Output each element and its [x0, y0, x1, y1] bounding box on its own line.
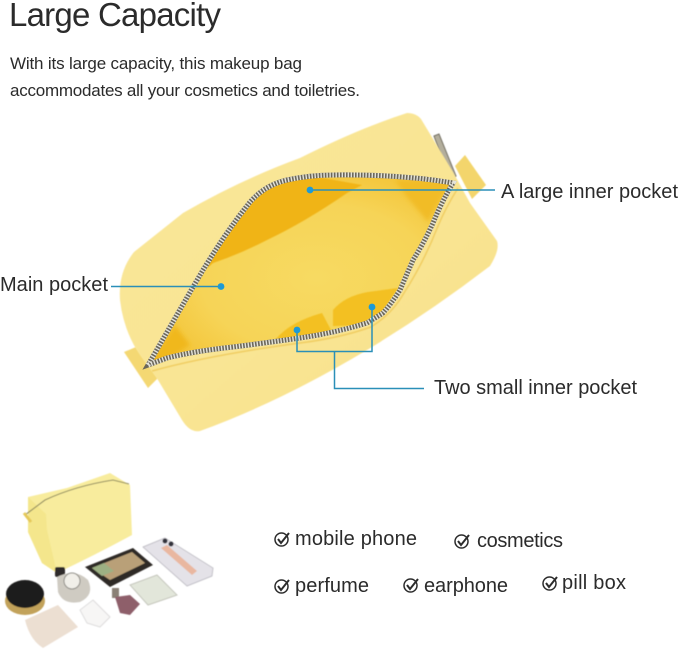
left tab [124, 347, 158, 388]
callout: a large inner pocket [307, 181, 678, 203]
item: mobile phone: mobile phone [295, 528, 417, 550]
description text [10, 54, 360, 100]
icon: mobile phone [143, 538, 213, 586]
right tab and zipper pull [434, 134, 486, 199]
item: earphone: earphone [424, 575, 508, 597]
icon: eyeshadow palette [85, 548, 153, 587]
back inner wall [395, 180, 450, 222]
callout: main pocket: Main pocket [0, 274, 108, 296]
icon: powder compact [130, 575, 177, 605]
zip opening interior [154, 177, 449, 360]
icon: pill box [25, 605, 78, 648]
product photo: bag with contents [5, 473, 213, 648]
bag body [120, 113, 498, 431]
callout: main pocket [0, 274, 224, 296]
closed yellow bag [24, 473, 132, 573]
zipper teeth [148, 175, 453, 365]
two small inner pockets [276, 288, 398, 342]
lower left shadow [154, 324, 191, 360]
description text: accommodates all your cosmetics and toiletries. [10, 81, 360, 100]
item: cosmetics: cosmetics [477, 530, 563, 552]
item: perfume: perfume [295, 575, 369, 597]
callout: two small inner pocket [294, 304, 637, 399]
large inner pocket [205, 172, 362, 270]
description text: With its large capacity, this makeup bag [10, 54, 302, 73]
checklist [275, 528, 626, 597]
callout: a large inner pocket: A large inner pocket [501, 181, 678, 203]
icon: perfume bottle [55, 567, 90, 603]
icon: earphone case [80, 600, 110, 627]
open makeup bag illustration [120, 113, 498, 431]
item: pill box: pill box [562, 572, 626, 594]
icon: nail polish [112, 588, 140, 615]
callout: two small inner pocket: Two small inner pocket [434, 377, 637, 399]
icon: cushion compact [5, 580, 45, 615]
zipper tape seam [152, 188, 458, 371]
